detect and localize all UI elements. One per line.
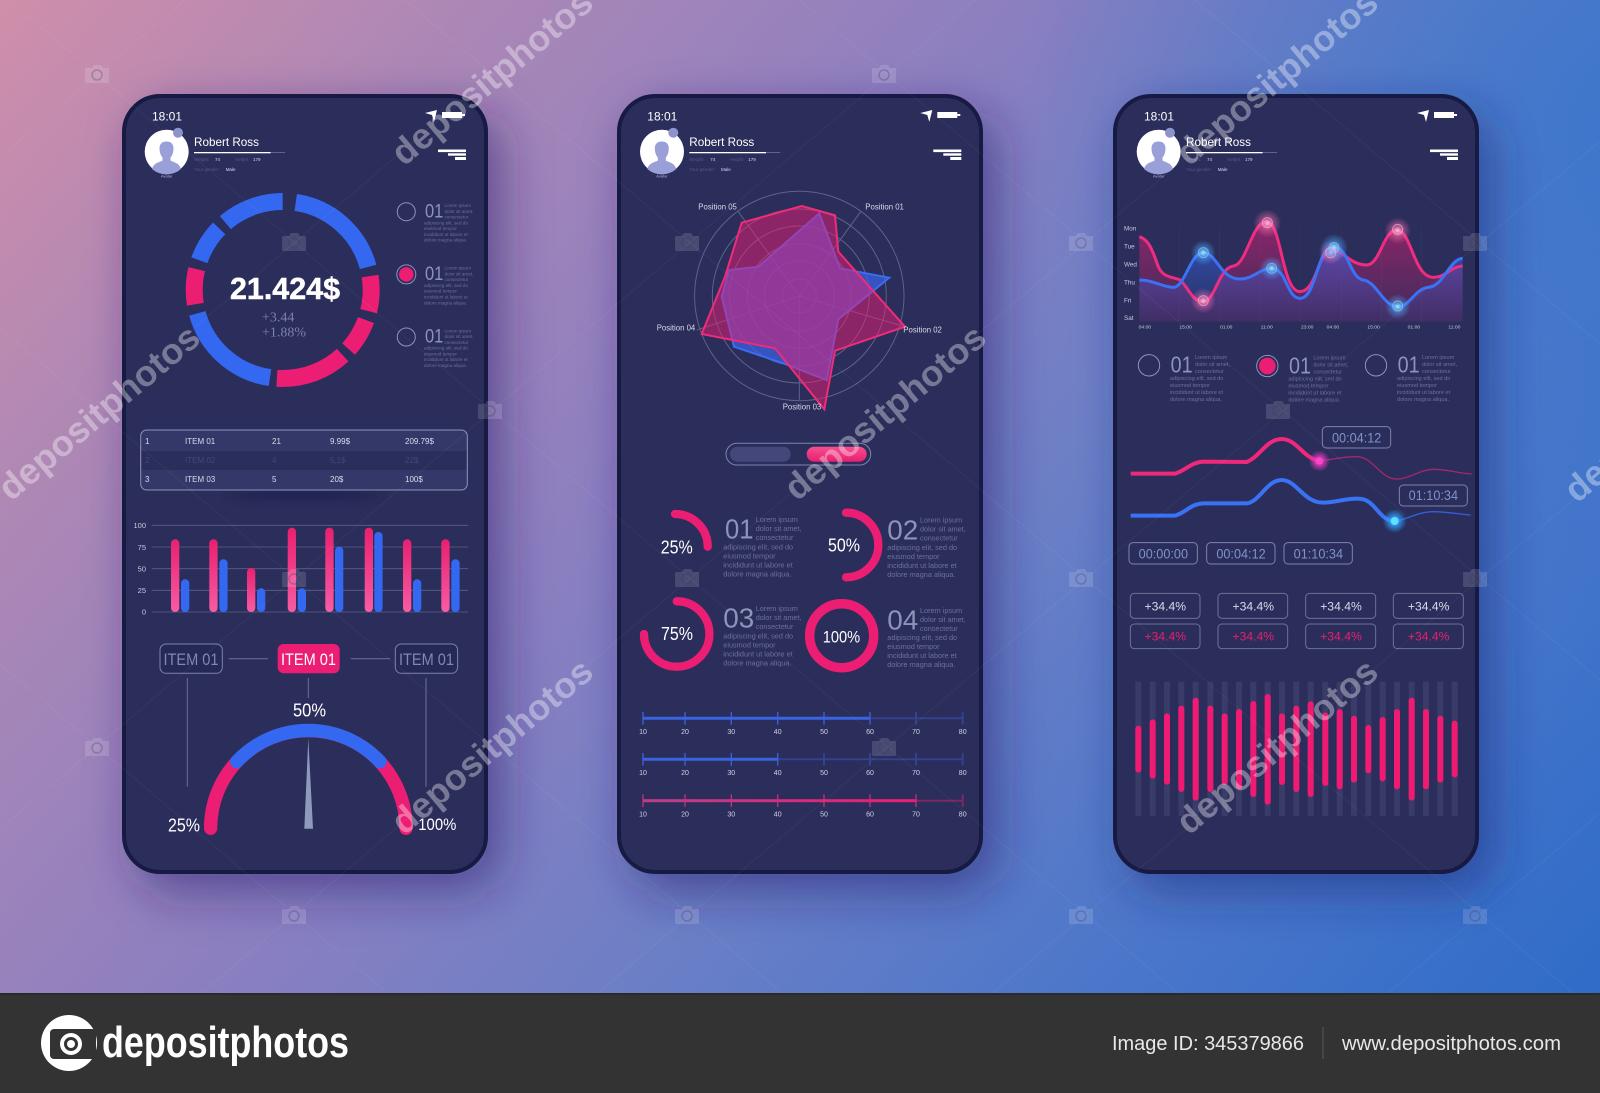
progress ring 25 percent with text: eiusmod tempor: [723, 551, 776, 560]
donut change values: [262, 311, 306, 341]
legend item 2 selected: dolor sit amet,: [1313, 363, 1349, 369]
time pills: 00:00:00: [1139, 545, 1188, 561]
slider 2: 20: [681, 770, 689, 777]
blue wave: 01:10:34: [1409, 487, 1458, 503]
progress ring 25 percent with text: dolore magna aliqua.: [723, 569, 791, 578]
slider 1: 30: [727, 729, 735, 736]
progress ring 100 percent with text: dolor sit amet,: [920, 615, 966, 624]
weekly area line chart: Fri: [1124, 297, 1131, 304]
slider 3: 80: [959, 811, 967, 818]
progress ring 100 percent with text: eiusmod tempor: [887, 642, 940, 651]
slider 1: 70: [912, 729, 920, 736]
legend item 1: eiusmod tempor: [1170, 383, 1210, 389]
phone 3 status and profile header: Avatar: [1153, 174, 1165, 178]
legend item 2 selected: adipiscing elit, sed do: [1288, 377, 1342, 383]
item selector: ITEM 01: [281, 650, 336, 669]
legend item 3: dolor sit amet,: [1422, 362, 1457, 368]
legend option 2 selected: Lorem ipsum: [444, 266, 471, 271]
legend item 1: dolore magna aliqua.: [1170, 397, 1223, 403]
slider 3: 60: [866, 811, 874, 818]
diagonal watermark text: depositphotos: [776, 316, 994, 508]
progress ring 75 percent with text: Lorem ipsum: [756, 604, 798, 613]
legend option 2 selected: eiusmod tempor: [424, 289, 457, 294]
slider 2: [639, 753, 967, 777]
legend row: [1138, 352, 1457, 404]
pink wave: 00:04:12: [1332, 429, 1382, 445]
equalizer chart: [1135, 682, 1458, 816]
legend item 1: Lorem ipsum: [1195, 355, 1228, 361]
data table: 100$: [405, 475, 423, 484]
weekly area line chart: 04:00: [1139, 325, 1151, 331]
semicircle gauge: 25%: [168, 816, 200, 836]
radar chart: Position 05: [698, 202, 738, 211]
legend option 2 selected: dolore magna aliqua.: [424, 300, 467, 305]
progress ring 25 percent with text: 01: [725, 513, 754, 544]
phone 2 body: [619, 96, 997, 892]
slider 3: 70: [912, 811, 920, 818]
timeline waves: [1131, 427, 1472, 533]
slider 2: 50: [820, 770, 828, 777]
weekly area line chart: Mon: [1124, 226, 1137, 233]
legend item 1: consectetur: [1195, 369, 1224, 375]
slider 1: 10: [639, 729, 647, 736]
progress ring 100 percent with text: Lorem ipsum: [920, 606, 962, 615]
legend item 3: adipiscing elit, sed do: [1397, 376, 1450, 382]
phone 3 status and profile header: Male: [1218, 167, 1228, 172]
donut change values: +3.44: [262, 311, 294, 326]
legend option 1: adipiscing elit, sed do: [424, 220, 468, 225]
data table: 20$: [330, 475, 344, 484]
legend option 3: dolor sit amet,: [444, 334, 473, 339]
progress ring 50 percent with text: eiusmod tempor: [887, 552, 940, 561]
slider 1: 50: [820, 729, 828, 736]
progress ring 75 percent with text: incididunt ut labore et: [723, 649, 793, 658]
legend option 1: Lorem ipsum: [444, 203, 471, 208]
percent change grid: +34.4%: [1233, 630, 1274, 644]
legend option 2 selected: 01: [425, 264, 443, 285]
time pills: 01:10:34: [1294, 545, 1343, 561]
progress ring 75 percent with text: [644, 601, 802, 667]
bar chart: 25: [138, 586, 146, 595]
legend item 1: dolor sit amet,: [1195, 362, 1230, 368]
progress ring 25 percent with text: incididunt ut labore et: [723, 560, 793, 569]
progress ring 25 percent with text: Lorem ipsum: [756, 515, 798, 524]
footer logo: [41, 1015, 349, 1071]
bar chart: 0: [142, 608, 146, 616]
bar chart: 100: [133, 521, 146, 530]
phone 2 status and profile header: Your gender:: [689, 167, 715, 172]
legend option 1: 01: [425, 201, 443, 222]
slider 1: 40: [774, 729, 782, 736]
item selector: [160, 644, 458, 787]
legend option 2 selected: [397, 264, 473, 305]
phone 2 status and profile header: Male: [721, 167, 731, 172]
footer bar: [0, 993, 1600, 1093]
time pills: 00:04:12: [1216, 545, 1266, 561]
phone 3 status and profile header: [1137, 110, 1458, 178]
phone 1 status and profile header: Avatar: [161, 174, 173, 178]
legend option 3: incididunt ut labore et: [424, 357, 468, 362]
legend option 1: dolor sit amet,: [444, 209, 473, 214]
legend option 3: [397, 327, 473, 368]
phone 2 status and profile header: Weight:: [689, 157, 704, 162]
legend item 3: 01: [1398, 352, 1420, 378]
phone 2 status and profile header: 18:01: [647, 110, 678, 124]
slider 2: 60: [866, 770, 874, 777]
legend option 3: consectetur: [444, 340, 469, 345]
data table: 209.79$: [405, 437, 434, 446]
diagonal watermark text: [0, 0, 1600, 842]
legend item 1: incididunt ut labore et: [1170, 390, 1223, 396]
slider 1: [639, 712, 967, 736]
percent change grid: +34.4%: [1233, 599, 1274, 613]
phone 3: timeline dashboard: [1115, 96, 1493, 892]
progress ring 100 percent with text: 04: [887, 604, 918, 635]
weekly area line chart: 04:00: [1327, 325, 1339, 331]
weekly area line chart: 01:00: [1408, 325, 1420, 331]
phone 1 status and profile header: Height:: [235, 157, 249, 162]
progress ring 50 percent with text: 02: [887, 514, 918, 545]
radar chart: Position 03: [783, 402, 821, 411]
legend option 3: 01: [425, 327, 443, 348]
semicircle gauge: [168, 701, 456, 836]
semicircle gauge: 50%: [293, 701, 326, 721]
data table: ITEM 01: [185, 437, 216, 446]
phone 1 status and profile header: Weight:: [194, 157, 209, 162]
toggle switch: [726, 443, 871, 465]
progress ring 100 percent with text: 100%: [823, 628, 860, 647]
progress ring 100 percent with text: adipiscing elit, sed do: [887, 633, 957, 642]
donut total value: 21.424$: [230, 271, 340, 306]
progress ring 100 percent with text: dolore magna aliqua.: [887, 660, 955, 669]
progress ring 25 percent with text: adipiscing elit, sed do: [723, 542, 793, 551]
legend option 3: adipiscing elit, sed do: [424, 346, 468, 351]
phone 3 status and profile header: Weight:: [1186, 157, 1201, 162]
phone 1 status and profile header: Male: [226, 167, 236, 172]
phone 3 status and profile header: 179: [1245, 157, 1253, 162]
progress ring 75 percent with text: dolor sit amet,: [756, 613, 802, 622]
progress ring 50 percent with text: 50%: [828, 536, 860, 556]
progress ring 50 percent with text: dolore magna aliqua.: [887, 570, 955, 579]
data table: 9.99$: [330, 437, 351, 446]
item selector: ITEM 01: [164, 650, 218, 669]
donut chart: [194, 202, 371, 378]
data table: 1: [145, 437, 150, 446]
legend item 3: Lorem ipsum: [1422, 355, 1455, 361]
legend item 3: consectetur: [1422, 369, 1451, 375]
legend item 1: 01: [1171, 352, 1193, 378]
data table: 2: [145, 456, 150, 465]
weekly area line chart: Sat: [1124, 315, 1134, 322]
progress ring 100 percent with text: [810, 604, 966, 669]
legend item 2 selected: Lorem ipsum: [1313, 356, 1346, 362]
weekly area line chart: Wed: [1124, 262, 1137, 269]
semicircle gauge: 100%: [418, 815, 456, 834]
progress ring 75 percent with text: 75%: [661, 624, 693, 644]
footer logo: depositphotos: [102, 1018, 349, 1067]
weekly area line chart: Thu: [1124, 279, 1135, 286]
slider 1: 20: [681, 729, 689, 736]
progress ring 25 percent with text: [661, 513, 802, 578]
progress ring 100 percent with text: consectetur: [920, 624, 958, 633]
legend option 2 selected: dolor sit amet,: [444, 272, 473, 277]
phone 3 status and profile header: 74: [1207, 157, 1213, 162]
diagonal watermark text: depositphotos: [1168, 650, 1386, 842]
legend option 1: dolore magna aliqua.: [424, 238, 467, 243]
data table: ITEM 03: [185, 475, 216, 484]
legend item 2 selected: dolore magna aliqua.: [1288, 398, 1341, 404]
radar chart: [657, 191, 942, 411]
slider 2: 30: [727, 770, 735, 777]
percent change grid: +34.4%: [1408, 599, 1450, 613]
phone 1 body: [124, 96, 502, 892]
radar chart: Position 01: [865, 202, 904, 211]
legend option 3: Lorem ipsum: [444, 328, 471, 333]
legend option 3: dolore magna aliqua.: [424, 363, 467, 368]
progress ring 50 percent with text: incididunt ut labore et: [887, 561, 957, 570]
progress ring 25 percent with text: dolor sit amet,: [756, 524, 802, 533]
weekly area line chart: Tue: [1124, 244, 1135, 251]
legend item 1: [1138, 352, 1230, 403]
bar chart: 75: [138, 543, 146, 552]
data table: [141, 430, 467, 498]
weekly area line chart: 01:00: [1220, 325, 1233, 331]
footer url: www.depositphotos.com: [1341, 1033, 1561, 1055]
legend option 1: consectetur: [444, 214, 469, 220]
radar chart: Position 04: [657, 324, 696, 333]
slider 2: 40: [774, 770, 782, 777]
data table: 4: [272, 456, 277, 465]
slider 3: [639, 794, 967, 818]
slider 3: 20: [681, 811, 689, 818]
phone 1 status and profile header: Robert Ross: [194, 136, 259, 149]
legend option 2 selected: incididunt ut labore et: [424, 295, 468, 300]
slider 3: 30: [727, 811, 735, 818]
legend item 3: incididunt ut labore et: [1397, 390, 1450, 396]
phone 1 status and profile header: 18:01: [152, 110, 182, 124]
legend item 1: adipiscing elit, sed do: [1170, 376, 1223, 382]
data table: 5: [272, 475, 277, 484]
slider 3: 10: [639, 811, 647, 818]
donut change values: +1.88%: [262, 326, 306, 341]
phone 2 status and profile header: 179: [748, 157, 756, 162]
legend item 2 selected: 01: [1289, 352, 1311, 378]
legend option 1: incididunt ut labore et: [424, 232, 468, 237]
progress ring 25 percent with text: consectetur: [756, 533, 794, 542]
legend item 2 selected: consectetur: [1313, 370, 1342, 376]
legend item 3: eiusmod tempor: [1397, 383, 1437, 389]
legend item 3: [1365, 352, 1457, 403]
slider 3: 40: [774, 811, 782, 818]
legend item 3: dolore magna aliqua.: [1397, 397, 1450, 403]
progress ring 75 percent with text: adipiscing elit, sed do: [723, 631, 793, 640]
phone 1: donut dashboard: [124, 96, 502, 892]
percent change grid: [1130, 593, 1463, 649]
progress ring 75 percent with text: dolore magna aliqua.: [723, 658, 791, 667]
progress ring 100 percent with text: incididunt ut labore et: [887, 651, 957, 660]
legend options: [397, 201, 473, 368]
progress ring 50 percent with text: dolor sit amet,: [920, 525, 966, 534]
phone 2 status and profile header: Height:: [730, 157, 745, 162]
data table: ITEM 02: [185, 456, 216, 465]
legend item 2 selected: eiusmod tempor: [1288, 384, 1328, 390]
blue wave: [1131, 480, 1471, 533]
phone 3 status and profile header: Height:: [1227, 157, 1241, 162]
phone 1 status and profile header: 179: [253, 157, 261, 162]
legend option 2 selected: consectetur: [444, 277, 469, 282]
phone 3 status and profile header: Robert Ross: [1186, 136, 1251, 149]
progress ring 75 percent with text: eiusmod tempor: [723, 640, 776, 649]
progress ring 75 percent with text: consectetur: [756, 622, 794, 631]
data table: 3: [145, 475, 150, 484]
percent change grid: +34.4%: [1145, 630, 1186, 644]
slider 2: 70: [912, 770, 920, 777]
data table: 5,1$: [330, 456, 346, 465]
weekly area line chart: 11:00: [1448, 325, 1461, 331]
phone 1 status and profile header: Your gender:: [194, 167, 220, 172]
weekly area line chart: 15:00: [1179, 325, 1192, 331]
phone 1 status and profile header: [145, 110, 466, 178]
slider 1: 60: [866, 729, 874, 736]
phone 3 body: [1115, 96, 1493, 892]
legend option 1: eiusmod tempor: [424, 226, 457, 231]
bar chart: [133, 521, 468, 616]
progress ring 50 percent with text: adipiscing elit, sed do: [887, 543, 957, 552]
phone 2: radar dashboard: [619, 96, 997, 892]
phone 2 status and profile header: Robert Ross: [689, 136, 754, 149]
image id: Image ID: 345379866: [1112, 1033, 1304, 1055]
weekly area line chart: 11:00: [1261, 325, 1273, 331]
legend item 2 selected: [1257, 352, 1349, 404]
pink wave: [1131, 427, 1472, 479]
slider 3: 50: [820, 811, 828, 818]
item selector: ITEM 01: [399, 650, 454, 669]
phone 3 status and profile header: Your gender:: [1186, 167, 1212, 172]
phone 2 status and profile header: 74: [710, 157, 716, 162]
slider 1: 80: [959, 729, 967, 736]
slider 2: 80: [959, 770, 967, 777]
time pills: [1129, 543, 1352, 564]
progress ring 25 percent with text: 25%: [661, 537, 693, 557]
slider 2: 10: [639, 770, 647, 777]
percent change grid: +34.4%: [1320, 599, 1362, 613]
percent change grid: +34.4%: [1408, 630, 1450, 644]
legend option 1: [397, 201, 473, 243]
percent change grid: +34.4%: [1320, 630, 1362, 644]
legend item 2 selected: incididunt ut labore et: [1288, 391, 1342, 397]
bar chart: 50: [138, 564, 146, 574]
phone 1 status and profile header: 74: [215, 157, 221, 162]
data table: 22$: [405, 456, 419, 465]
percent change grid: +34.4%: [1145, 599, 1186, 613]
legend option 3: eiusmod tempor: [424, 351, 457, 356]
progress ring 50 percent with text: [828, 513, 966, 579]
progress ring 50 percent with text: Lorem ipsum: [920, 516, 962, 525]
weekly area line chart: [1124, 209, 1463, 331]
weekly area line chart: 15:00: [1367, 325, 1380, 331]
progress ring 75 percent with text: 03: [723, 603, 754, 634]
weekly area line chart: 23:00: [1301, 325, 1314, 331]
phone 2 status and profile header: [640, 110, 961, 178]
phone 2 status and profile header: Avatar: [656, 174, 668, 178]
radar chart: Position 02: [903, 326, 942, 335]
legend option 2 selected: adipiscing elit, sed do: [424, 283, 468, 288]
progress ring 50 percent with text: consectetur: [920, 534, 958, 543]
data table: 21: [272, 437, 281, 446]
phone 3 status and profile header: 18:01: [1144, 110, 1174, 124]
diagonal watermark text: depositphotos: [383, 650, 601, 842]
